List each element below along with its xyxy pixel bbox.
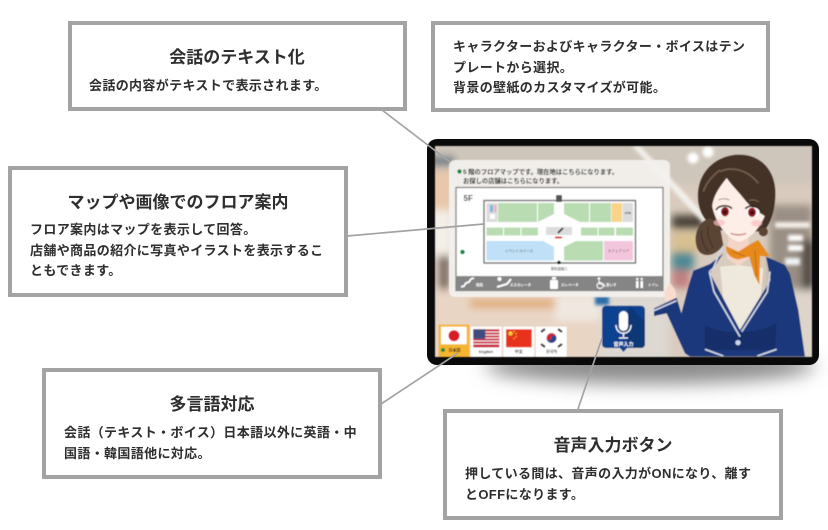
- floor plan: ATM: [625, 211, 631, 215]
- screen background: blurred shopping mall: [430, 140, 820, 360]
- jacket: [654, 253, 805, 357]
- text: conversation text: 会話の内容がテキストで表示されます。: [89, 78, 328, 93]
- text: character and wallpaper: 背景の壁紙のカスタマイズが可能。: [453, 80, 666, 95]
- tablet shadow: [485, 348, 815, 384]
- text: character and wallpaper: [453, 39, 745, 95]
- scarf: [726, 240, 770, 285]
- text: floor guide: ともできます。: [30, 263, 122, 278]
- voice input button: [602, 306, 645, 352]
- text: character and wallpaper: キャラクターおよびキャラクター・ボイスはテン: [453, 39, 745, 54]
- Japanese flag tile: 日本語: [448, 346, 460, 352]
- tablet frame: [427, 139, 819, 365]
- text: voice input button: 押している間は、音声の入力がONになり、離す: [465, 466, 751, 481]
- legend bar: エレベータ: [561, 282, 579, 287]
- status dot and message: 5 階のフロアマップです。現在地はこちらになります。: [463, 167, 618, 176]
- heading: floor guide: マップや画像でのフロア案内: [68, 193, 288, 212]
- text: voice input button: [465, 466, 751, 502]
- heading: voice input button: 音声入力ボタン: [554, 436, 672, 455]
- map sheet: 5F: [464, 194, 473, 203]
- language selector: [438, 324, 567, 357]
- legend bar: 車いす: [606, 282, 617, 287]
- face: [711, 175, 768, 242]
- text: multi-language: 国語・韓国語他に対応。: [64, 446, 211, 460]
- hand and neck: [665, 283, 677, 304]
- text: multi-language: 会話（テキスト・ボイス）日本語以外に英語・中: [64, 425, 357, 440]
- heading: conversation text: 会話のテキスト化: [169, 48, 305, 67]
- voice input button: 音声入力: [613, 341, 634, 348]
- hair back and ponytail: [698, 155, 776, 232]
- text: voice input button: とOFFになります。: [465, 486, 584, 502]
- heading: multi-language: 多言語対応: [170, 395, 254, 414]
- status dot and message: [457, 167, 618, 185]
- legend bar: トイレ: [648, 283, 659, 287]
- status dot and message: お探しの店舗はこちらになります。: [463, 176, 563, 185]
- text: floor guide: フロア案内はマップを表示して回答。: [30, 222, 257, 237]
- floor plan: イベントスペース: [505, 248, 534, 253]
- character illustration: [654, 155, 805, 357]
- panel: voice input button: [443, 409, 783, 520]
- tablet illustration: [427, 139, 822, 396]
- blouse: [720, 265, 763, 332]
- map sheet: [456, 188, 663, 291]
- legend bar: エスカレータ: [510, 282, 531, 287]
- eyes and mouth: [714, 199, 762, 235]
- panel: multi-language: [42, 368, 382, 479]
- floor map panel: [449, 160, 670, 297]
- floor plan: カフェテリア: [608, 248, 630, 253]
- panel: conversation text: [68, 21, 407, 111]
- text: character and wallpaper: プレートから選択。: [453, 60, 573, 74]
- US flag tile: English: [479, 349, 494, 354]
- legend bar: [456, 276, 663, 291]
- text: floor guide: 店舗や商品の紹介に写真やイラストを表示するこ: [30, 242, 323, 258]
- floor plan: 帯院連絡口: [551, 266, 567, 271]
- Korean flag tile: 한국어: [546, 348, 557, 354]
- panel: character and wallpaper: [431, 21, 770, 112]
- text: multi-language: [64, 425, 357, 460]
- text: floor guide: [30, 222, 323, 278]
- fringe: [710, 174, 769, 216]
- legend bar: 階段: [476, 282, 484, 287]
- panel: floor guide: [8, 166, 348, 297]
- Chinese flag tile: 中文: [515, 348, 523, 354]
- floor plan: [484, 195, 636, 271]
